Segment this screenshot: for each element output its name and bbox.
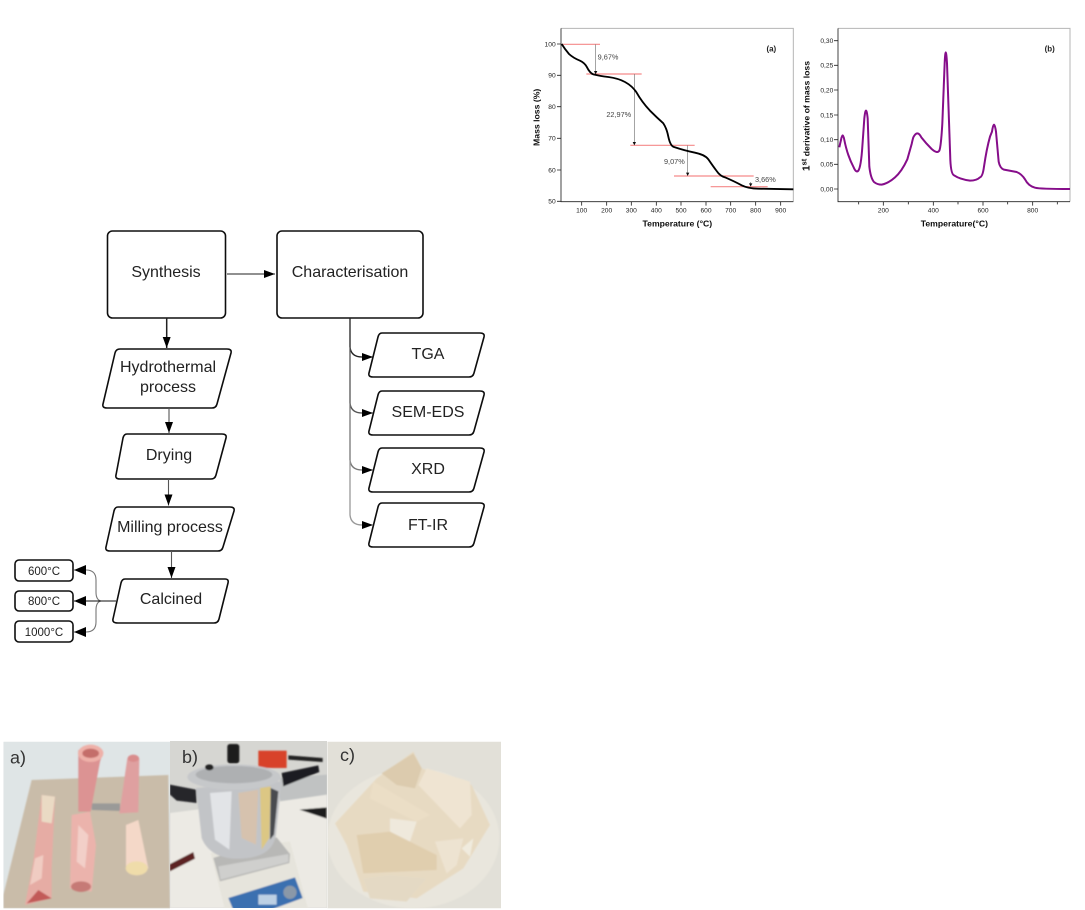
chart b y tick labels: 0,00 [820,186,834,193]
chart a y tick labels: 80 [548,104,556,111]
step: Milling process: Milling process [117,519,223,536]
panel: thermogravimetric mass loss chart (a): Mass loss (%) [531,89,541,146]
chart a x tick labels: 500 [675,207,687,214]
method: SEM-EDS [369,391,484,435]
chart b y tick labels: 0,30 [820,38,834,45]
method: XRD: XRD [411,461,445,478]
step: Drying: Drying [146,447,192,464]
chart a x tick labels: 900 [775,207,787,214]
box: Characterisation [277,231,423,318]
chart b panel letter: (b) [1045,45,1055,54]
step: Drying [116,434,226,479]
chart a y tick labels: 60 [548,167,556,174]
method: XRD [369,448,484,492]
step: Hydrothermal process: Hydrothermal [120,359,216,376]
temperature: 600°C: 600°C [28,566,60,578]
box: Synthesis: Synthesis [131,264,201,281]
red baselines [562,44,768,187]
temperature: 600°C [15,560,73,581]
method: TGA [369,333,484,377]
chart a axis titles: Temperature (°C) [642,218,712,228]
photo c: white material pieces in a dish [327,742,501,908]
step arrows [596,44,751,186]
method: TGA: TGA [412,346,445,363]
percentage labels: 22,97% [606,110,632,119]
chart a x tick labels: 200 [601,207,613,214]
chart a y tick labels: 50 [548,199,556,206]
chart a x tick labels: 600 [700,207,712,214]
chart a x tick labels: 100 [576,207,588,214]
chart a y tick labels: 100 [545,41,556,48]
chart a x tick labels: 700 [725,207,737,214]
panel: first derivative of mass loss chart (b) [799,28,1070,228]
chart b y tick labels: 0,25 [820,63,834,70]
chart b x tick labels [878,207,1039,214]
step: Hydrothermal process [103,349,231,408]
chart a axes [557,28,793,206]
panel: first derivative of mass loss chart (b): st [799,158,808,165]
connectors [74,274,373,632]
method: FT-IR [369,503,484,547]
step: Calcined: Calcined [140,591,202,608]
label b: b) [182,747,198,767]
chart a y tick labels: 90 [548,73,556,80]
photo a: bone tubes on a board [3,742,170,908]
chart b y tick labels: 0,15 [820,112,834,119]
temperature: 800°C: 800°C [28,596,60,608]
chart b x tick labels: 600 [977,207,989,214]
step: Calcined [113,579,228,623]
chart b y tick labels: 0,20 [820,87,834,94]
chart b axis titles: Temperature(°C) [921,218,988,228]
chart a frame [561,28,793,202]
panel: first derivative of mass loss chart (b): 1 [802,165,813,171]
chart a panel letter: (a) [766,44,777,53]
panel: thermogravimetric mass loss chart (a) [531,28,793,228]
chart a x tick labels: 300 [626,207,637,214]
step: Milling process [106,507,234,551]
panel: first derivative of mass loss chart (b): derivative of mass loss [802,61,812,159]
mass loss curve [562,44,793,189]
chart a x tick labels [576,207,787,214]
derivative curve [839,52,1070,189]
chart a y tick labels [545,41,556,206]
temperature: 1000°C: 1000°C [25,627,63,639]
chart b y tick labels [820,38,834,193]
temperature: 1000°C [15,621,73,642]
photo b: pressure cooker on scale [170,741,327,910]
step: Hydrothermal process: process [140,379,196,396]
chart a x tick labels: 400 [651,207,662,214]
chart b y tick labels: 0,05 [820,162,834,169]
chart b axes [834,28,1070,206]
percentage labels: 9,07% [664,157,685,166]
chart b frame [838,28,1070,202]
method: SEM-EDS: SEM-EDS [392,404,464,421]
flowchart [15,231,484,642]
percentage labels: 9,67% [598,53,619,62]
box: Characterisation: Characterisation [292,264,408,281]
temperature: 800°C [15,591,73,611]
percentage labels: 3,66% [755,175,776,184]
chart b y tick labels: 0,10 [820,137,834,144]
method: FT-IR: FT-IR [408,517,448,534]
chart b x tick labels: 200 [878,207,889,214]
chart a x tick labels: 800 [750,207,762,214]
percentage labels [598,53,776,184]
label a: a) [10,747,26,767]
chart b x tick labels: 800 [1027,207,1039,214]
chart b x tick labels: 400 [928,207,939,214]
label c: c) [340,745,355,765]
box: Synthesis [108,231,226,318]
chart a y tick labels: 70 [548,136,556,143]
